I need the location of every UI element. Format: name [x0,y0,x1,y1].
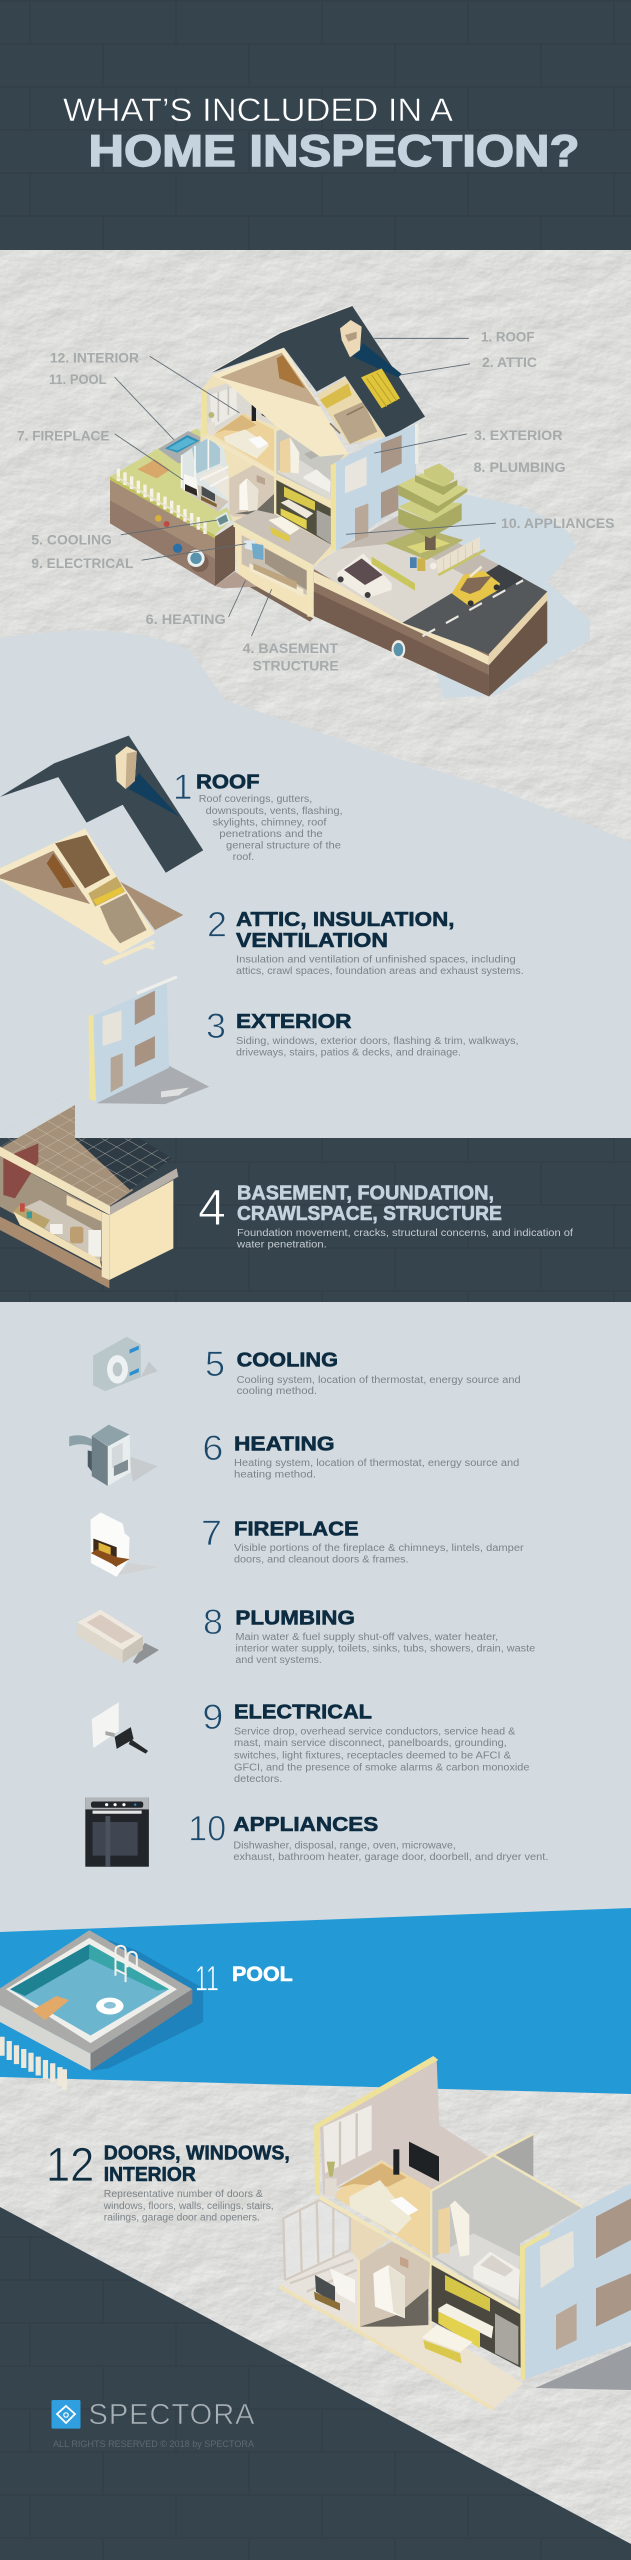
section 12: interior text [46,2139,290,2223]
living floor [319,2142,439,2263]
icon: picket fence [2,2037,64,2090]
heading: ATTIC, INSULATION, [236,909,454,931]
heading [237,1182,502,1225]
upper left room [202,383,282,477]
description [234,1543,524,1566]
description: cooling method. [237,1386,317,1397]
background: pale blue wall [0,631,631,1310]
cream structure behind rooms [200,348,348,567]
label exterior: 3. EXTERIOR [474,428,563,443]
number: 6 [202,1429,223,1468]
upper back wall [314,2056,488,2196]
sun room [182,437,228,512]
lawn [385,528,463,560]
description: windows, floors, walls, ceilings, stairs, [103,2201,274,2212]
kitchen [276,480,331,544]
label appliances: 10. APPLIANCES [501,516,614,531]
fence [437,537,485,575]
icon: fireplace [91,1512,159,1577]
header band [0,0,631,250]
description [236,1228,573,1251]
number: 12 [46,2139,94,2192]
heading: COOLING [237,1350,338,1372]
heading: PLUMBING [235,1607,355,1629]
number: 2 [207,906,227,944]
number: 10 [188,1810,226,1849]
kitchen floor [233,510,332,565]
description: mast, main service disconnect, panelboards, grounding, [234,1738,507,1749]
dark band: basement section [0,1138,631,1302]
wordmark: SPECTORA [88,2399,255,2431]
number: 3 [206,1007,226,1046]
label heating: 6. HEATING [146,612,226,627]
description [234,1458,519,1481]
label pool: 11. POOL [49,372,106,387]
ground shadow [535,2346,631,2390]
heading: FIREPLACE [234,1518,359,1540]
description: driveways, stairs, patios & decks, and drainage. [236,1048,461,1058]
tree [398,463,467,550]
pool [158,431,217,463]
description [235,1632,536,1666]
description: Cooling system, location of thermostat, energy source and [237,1375,521,1386]
number: 11 [195,1960,219,1998]
icon: basement cutaway [0,1090,178,1288]
heading: CRAWLSPACE, STRUCTURE [237,1203,502,1225]
label plumbing: 8. PLUMBING [474,460,566,475]
description: Dishwasher, disposal, range, oven, microwave, [233,1841,456,1852]
yard, tree, fence and yellow car [385,463,500,607]
yellow car [452,567,500,607]
background: lower blue wall [0,1300,631,1940]
label attic: 2. ATTIC [482,355,537,370]
roof [212,305,425,438]
label interior: 12. INTERIOR [50,350,139,366]
bins [410,557,437,571]
title line one: WHAT’S INCLUDED IN A [63,92,453,128]
description: general structure of the [226,841,341,852]
description: Insulation and ventilation of unfinished spaces, including [236,955,516,966]
lower left room [229,463,275,517]
cutaway house body [110,305,425,622]
section 8: plumbing text [203,1603,536,1666]
description [233,1841,548,1863]
number: 1 [173,768,192,807]
copyright: ALL RIGHTS RESERVED © 2018 by SPECTORA [53,2439,255,2450]
heading: DOORS, WINDOWS, [104,2142,290,2164]
background: plaster wall lower [0,2060,631,2560]
planter [372,557,415,591]
driveway block [314,513,547,696]
description: water penetration. [236,1240,327,1251]
title line two: HOME INSPECTION? [88,127,580,176]
label structure: STRUCTURE [253,658,339,674]
heading: BASEMENT, FOUNDATION, [237,1182,494,1204]
heading: HEATING [234,1433,335,1455]
exterior wall [520,2183,631,2380]
heading: ROOF [196,772,260,794]
number: 9 [202,1698,223,1737]
section 10: appliances text [188,1810,548,1863]
kitchen [422,2265,522,2368]
description: Roof coverings, gutters, [199,794,312,805]
description: exhaust, bathroom heater, garage door, doorbell, and dryer vent. [233,1852,548,1863]
icon: attic [0,828,183,965]
heading [104,2142,290,2186]
section 6: heating text [202,1429,519,1481]
attic gable [212,348,385,457]
description [199,794,343,863]
icon: exterior wall [89,977,209,1104]
hero labels [17,330,614,674]
label cooling: 5. COOLING [31,533,112,548]
garden block [110,428,235,586]
description: Siding, windows, exterior doors, flashing & trim, walkways, [236,1036,518,1047]
white car [337,553,392,598]
number: 5 [205,1345,225,1384]
heading: EXTERIOR [236,1011,352,1033]
background: plaster wall upper [0,250,631,900]
section 2: attic text [207,906,524,977]
dark footer triangle [0,2207,631,2560]
label leader lines [115,338,496,636]
upper right room [274,423,346,514]
description: heating method. [234,1470,316,1481]
label electrical: 9. ELECTRICAL [31,556,133,571]
description: doors, and cleanout doors & frames. [234,1555,409,1566]
description [103,2189,274,2223]
bedroom [357,2242,430,2328]
sunroom [280,2200,388,2327]
heading [236,909,454,952]
description: interior water supply, toilets, sinks, tubs, showers, drain, waste [235,1644,536,1655]
section 4: basement text [198,1179,573,1251]
section 9: electrical text [202,1698,530,1785]
icon: outlet and plug [92,1702,148,1754]
heading: INTERIOR [104,2164,196,2186]
description: Main water & fuel supply shut-off valves, water heater, [235,1632,498,1643]
description: skylights, chimney, roof [212,818,327,829]
description: railings, garage door and openers. [104,2212,260,2223]
island [268,517,300,543]
basement [215,522,313,622]
label basement: 4. BASEMENT [243,641,339,656]
section 11: pool text [195,1960,293,1998]
icons 5 to 10 [69,1337,159,1867]
icon: house mark [52,2400,80,2429]
bathroom [430,2134,582,2327]
description [234,1726,530,1785]
icon: furnace [69,1425,158,1486]
icon: oven [85,1798,149,1867]
description [236,955,524,977]
section 7: fireplace text [201,1514,524,1566]
heading: APPLIANCES [233,1814,378,1836]
description: Heating system, location of thermostat, energy source and [234,1458,519,1469]
description [236,1036,518,1058]
blue pool band [0,1908,631,2094]
description: GFCI, and the presence of smoke alarms & carbon monoxide [234,1762,530,1773]
cutaway interior illustration [280,2056,631,2411]
section 5: cooling text [205,1345,521,1397]
heading: VENTILATION [236,930,388,952]
description: downspouts, vents, flashing, [206,806,343,817]
icon: cooling unit [93,1337,158,1391]
logo: Spectora [52,2399,255,2450]
description: Representative number of doors & [104,2189,263,2200]
number: 8 [203,1603,223,1642]
description: Service drop, overhead service conductors, service head & [234,1726,516,1737]
section 1: roof text [173,768,343,863]
hero illustration: cutaway house [110,305,590,698]
description: Visible portions of the fireplace & chimneys, lintels, damper [234,1543,524,1554]
description: attics, crawl spaces, foundation areas and exhaust systems. [236,966,524,977]
terrace table [137,459,170,478]
label roof: 1. ROOF [481,330,534,344]
section illustrations 1 to 3 [0,736,209,1104]
description: and vent systems. [235,1655,322,1666]
water patch behind driveway [413,493,590,698]
description: detectors. [234,1774,282,1785]
description: Foundation movement, cracks, structural concerns, and indication of [237,1228,573,1239]
description: switches, light fixtures, receptacles deemed to be AFCI & [234,1750,511,1761]
icon: roof [0,736,203,873]
icon: pool [0,1930,203,2090]
description: penetrations and the [219,829,323,840]
number: 4 [198,1179,226,1236]
icon: bathtub [77,1610,159,1664]
lower floor slab [280,2285,523,2411]
label fireplace: 7. FIREPLACE [17,429,110,444]
number: 7 [201,1514,222,1553]
heading: ELECTRICAL [234,1702,372,1724]
exterior wall [331,424,418,552]
heading: POOL [232,1963,293,1986]
description [237,1375,521,1397]
section 3: exterior text [206,1007,518,1058]
description: roof. [233,852,254,863]
